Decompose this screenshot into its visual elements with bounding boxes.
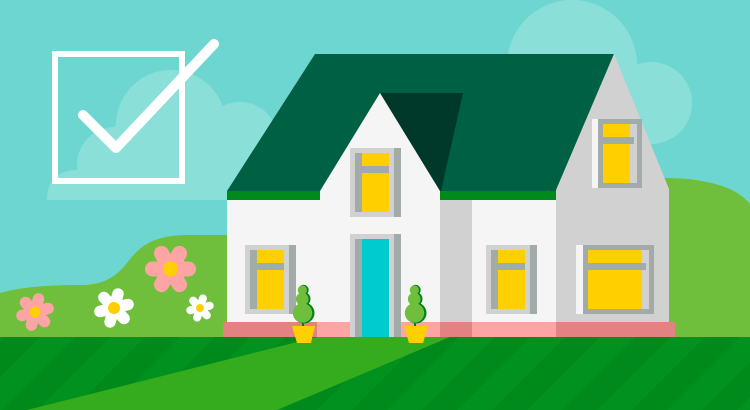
flower: large pink	[152, 253, 188, 285]
window: upper right	[592, 119, 642, 188]
window: dormer	[350, 148, 401, 217]
cloud: right	[507, 0, 692, 144]
window: lower right	[576, 245, 654, 314]
house	[223, 54, 675, 337]
plant: right topiary	[404, 285, 428, 343]
cloud: left	[47, 70, 280, 203]
plant: left topiary	[292, 285, 315, 343]
wall: shaded column	[440, 191, 472, 322]
icon: checkbox with checkmark	[55, 44, 214, 181]
door	[350, 234, 401, 337]
hill: right	[650, 178, 750, 340]
window: lower middle	[486, 245, 537, 314]
roof shadow	[380, 93, 463, 191]
flower: small pink	[19, 297, 51, 327]
lawn	[0, 337, 750, 410]
wall: main	[227, 93, 556, 322]
gutters	[227, 191, 556, 200]
garden path	[27, 337, 450, 410]
wall: right wing	[556, 54, 669, 322]
hill: left	[0, 235, 240, 340]
window: lower left	[245, 245, 296, 314]
roof	[227, 54, 614, 191]
flower: small white	[188, 297, 212, 319]
flower: medium white	[97, 292, 131, 324]
foundation	[223, 322, 675, 337]
